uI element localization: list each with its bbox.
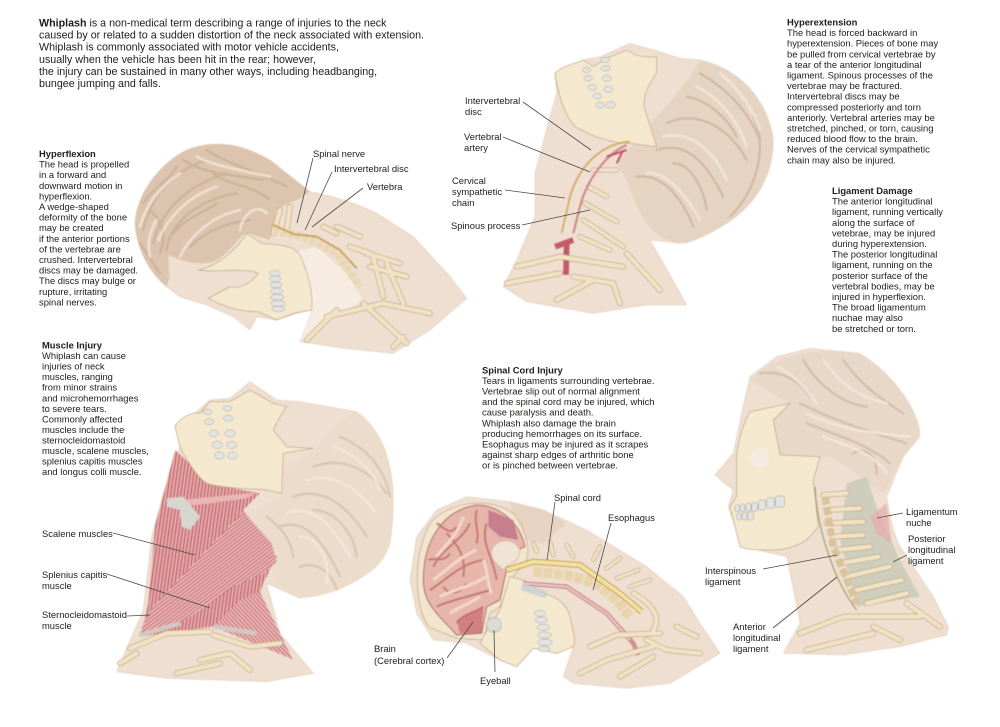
muscle figure skin	[117, 382, 393, 682]
brain	[423, 505, 525, 635]
labels: ligaments: Ligamentum	[906, 506, 958, 517]
labels: muscles: muscle	[42, 620, 72, 631]
labels: ligaments: ligament	[733, 643, 769, 654]
labels: ligaments: ligament	[705, 576, 741, 587]
labels: ligaments: ligament	[908, 555, 944, 566]
hyperextension text: stretched, pinched, or torn, causing	[787, 122, 933, 134]
hyperflexion text: in a forward and	[39, 169, 106, 180]
hyperextension text: hyperextension. Pieces of bone may	[787, 38, 938, 49]
labels: hyperextension	[451, 95, 591, 231]
labels: spinal cord section: Esophagus	[608, 512, 655, 523]
intro text: Whiplash is commonly associated with motor vehicle accidents,	[39, 42, 339, 54]
intro text: caused by or related to a sudden distortion of the neck associated with extension.	[39, 30, 424, 42]
labels: muscles: Splenius capitis	[42, 569, 107, 580]
muscle injury text: splenius capitis muscles	[42, 456, 143, 467]
hyperextension text: Intervertebral discs may be	[787, 91, 900, 102]
hyperextension text: The head is forced backward in	[787, 27, 917, 38]
eyeball	[487, 618, 501, 632]
ligament damage text: The posterior longitudinal	[832, 249, 937, 260]
muscle figure teeth	[203, 406, 238, 459]
intro text: the injury can be sustained in many other ways, including headbanging,	[39, 66, 377, 78]
hyperextension teeth	[583, 57, 615, 108]
labels: hyperextension: disc	[465, 106, 482, 117]
labels: hyperextension: Spinous process	[451, 220, 521, 231]
intro text: Whiplash is a non-medical term describing a range of injuries to the neck	[39, 18, 386, 30]
labels: ligaments	[705, 506, 958, 654]
spinal cord injury text: Esophagus may be injured as it scrapes	[482, 438, 649, 449]
labels: hyperextension: sympathetic	[452, 186, 502, 197]
labels: spinal cord section: Spinal cord	[554, 492, 601, 503]
hyperflexion text: may be created	[39, 222, 104, 233]
muscle injury text: to severe tears.	[42, 403, 107, 414]
hyperextension hair	[617, 60, 773, 243]
hyperextension skin	[503, 43, 773, 313]
ligament damage text: ligament, running vertically	[832, 206, 943, 217]
hyperflexion neck shade	[290, 247, 363, 342]
hyperflexion text: The head is propelled	[39, 159, 129, 170]
intro text: bungee jumping and falls.	[39, 78, 161, 90]
ligament figure spine	[800, 487, 940, 650]
hyperextension text: compressed posteriorly and torn	[787, 101, 921, 112]
labels: hyperflexion: Intervertebral disc	[334, 163, 409, 174]
hyperextension spine and artery	[507, 142, 660, 303]
ligament damage text: during hyperextension.	[832, 238, 927, 249]
labels: ligaments: Interspinous	[705, 565, 756, 576]
spinal cord injury text: Spinal Cord Injury	[482, 364, 564, 376]
muscle figure hair	[247, 412, 393, 598]
labels: hyperflexion: Spinal nerve	[313, 148, 365, 159]
ligament damage text: The anterior longitudinal	[832, 196, 933, 207]
spinal cord injury text: Vertebrae slip out of normal alignment	[482, 386, 640, 397]
hyperextension text: Hyperextension	[787, 16, 858, 28]
hyperflexion text: downward motion in	[39, 180, 122, 191]
labels: ligaments: nuche	[906, 517, 932, 528]
ligament damage text: vertebral bodies, may be	[832, 280, 935, 291]
muscle injury text: Muscle Injury	[42, 340, 103, 350]
illustration: hyperextension head	[503, 43, 773, 313]
muscle figure clavicles	[120, 632, 280, 673]
labels: hyperextension: artery	[464, 142, 488, 153]
ligament damage text: vetebrae, may be injured	[832, 227, 935, 238]
labels: spinal cord section	[374, 492, 655, 686]
muscle injury text: and microhemorrhages	[42, 392, 139, 403]
intro text: usually when the vehicle has been hit in the rear; however,	[39, 54, 316, 66]
hyperextension text: reduced blood flow to the brain.	[787, 133, 918, 144]
hyperextension skull	[555, 50, 657, 147]
labels: hyperflexion: Vertebra	[367, 181, 403, 192]
labels: spinal cord section: (Cerebral cortex)	[374, 655, 444, 666]
ligament damage text: The broad ligamentum	[832, 302, 926, 313]
hyperextension text: be pulled from cervical vertebrae by	[787, 48, 936, 59]
illustration: muscle head	[117, 382, 393, 682]
hyperflexion text: discs may be damaged.	[39, 265, 138, 276]
ligament figure hair	[750, 351, 920, 493]
section skin	[410, 497, 720, 688]
labels: ligaments: longitudinal	[908, 544, 955, 555]
muscle injury text: from minor strains	[42, 382, 117, 393]
labels: ligaments: Anterior	[733, 621, 766, 632]
section skull face	[480, 577, 575, 667]
ligament figure skin	[715, 348, 948, 655]
spinal cord injury text: Tears in ligaments surrounding vertebrae.	[482, 375, 654, 386]
section teeth	[534, 610, 552, 652]
hyperflexion text: crushed. Intervertebral	[39, 254, 133, 265]
hyperflexion text: A wedge-shaped	[39, 201, 109, 212]
labels: hyperextension: Intervertebral	[465, 95, 520, 106]
hyperextension text: a tear of the anterior longitudinal	[787, 59, 921, 70]
labels: hyperextension: chain	[452, 197, 474, 208]
ligament damage text: Ligament Damage	[832, 185, 913, 196]
labels: spinal cord section: Brain	[374, 643, 396, 654]
muscle injury text: Whiplash can cause	[42, 350, 126, 361]
ligament damage text: be stretched or torn.	[832, 323, 916, 334]
muscle injury text: sternocleidomastoid	[42, 434, 125, 445]
hyperflexion skull	[198, 233, 312, 320]
hyperflexion text: rupture, irritating	[39, 286, 107, 297]
labels: hyperextension: Vertebral	[464, 131, 502, 142]
labels: ligaments: longitudinal	[733, 632, 780, 643]
labels: hyperflexion	[297, 148, 409, 230]
illustration: spinal cord section	[410, 497, 720, 688]
section spine, cord and esophagus	[507, 542, 700, 677]
muscle injury text: injuries of neck	[42, 361, 105, 372]
hyperflexion text: The discs may bulge or	[39, 275, 136, 286]
labels: muscles: Sternocleidomastoid	[42, 609, 127, 620]
ligament damage text: nuchae may also	[832, 312, 903, 323]
skull rim	[417, 503, 528, 640]
ligament damage text: posterior surface of the	[832, 270, 928, 281]
muscle injury text: muscles, ranging	[42, 371, 113, 382]
illustration: hyperflexion head	[135, 144, 467, 353]
ligament figure teeth	[735, 496, 785, 520]
spinal cord injury text: producing hemorrhages on its surface.	[482, 428, 642, 439]
spinal cord injury text: and the spinal cord may be injured, which	[482, 396, 654, 407]
hyperflexion text: of the vertebrae are	[39, 243, 121, 254]
muscle injury text: muscles include the	[42, 424, 124, 435]
ligament figure skull	[730, 403, 820, 550]
illustration: ligament head	[715, 348, 948, 655]
spinal cord injury text: or is pinched between vertebrae.	[482, 459, 618, 470]
muscle injury text: Commonly affected	[42, 413, 123, 424]
hyperextension text: ligament. Spinous processes of the	[787, 70, 933, 80]
labels: muscles	[42, 528, 210, 631]
ligament damage text: along the surface of	[832, 217, 915, 228]
hyperextension text: anteriorly. Vertebral arteries may be	[787, 112, 935, 123]
hyperflexion hair	[135, 144, 310, 287]
hyperflexion text: spinal nerves.	[39, 296, 97, 307]
muscle injury text: and longus colli muscle.	[42, 466, 142, 477]
muscle injury text: muscle, scalene muscles,	[42, 445, 149, 456]
hyperflexion teeth	[270, 270, 285, 312]
muscle figure skull	[175, 390, 313, 493]
labels: spinal cord section: Eyeball	[480, 675, 511, 686]
hyperflexion text: Hyperflexion	[39, 148, 96, 159]
spinal cord injury text: against sharp edges of arthritic bone	[482, 449, 634, 460]
hyperextension text: vertebrae may be fractured.	[787, 80, 902, 91]
muscles	[138, 450, 293, 659]
labels: ligaments: Posterior	[908, 533, 946, 544]
labels: hyperextension: Cervical	[452, 175, 486, 186]
hyperextension text: Nerves of the cervical sympathetic	[787, 144, 930, 155]
hyperflexion text: hyperflexion.	[39, 190, 92, 201]
hyperextension text: chain may also be injured.	[787, 154, 896, 165]
hyperflexion spine	[273, 207, 430, 347]
labels: muscles: muscle	[42, 580, 72, 591]
ligament damage text: injured in hyperflexion.	[832, 291, 926, 302]
spinal cord injury text: cause paralysis and death.	[482, 407, 594, 418]
ligaments	[840, 477, 920, 607]
hyperflexion skin	[135, 144, 467, 353]
hyperflexion text: deformity of the bone	[39, 212, 127, 223]
spinal cord injury text: Whiplash also damage the brain	[482, 417, 616, 428]
ligament damage text: ligament, running on the	[832, 259, 933, 270]
hyperflexion text: if the anterior portions	[39, 233, 130, 244]
labels: muscles: Scalene muscles	[42, 528, 113, 539]
